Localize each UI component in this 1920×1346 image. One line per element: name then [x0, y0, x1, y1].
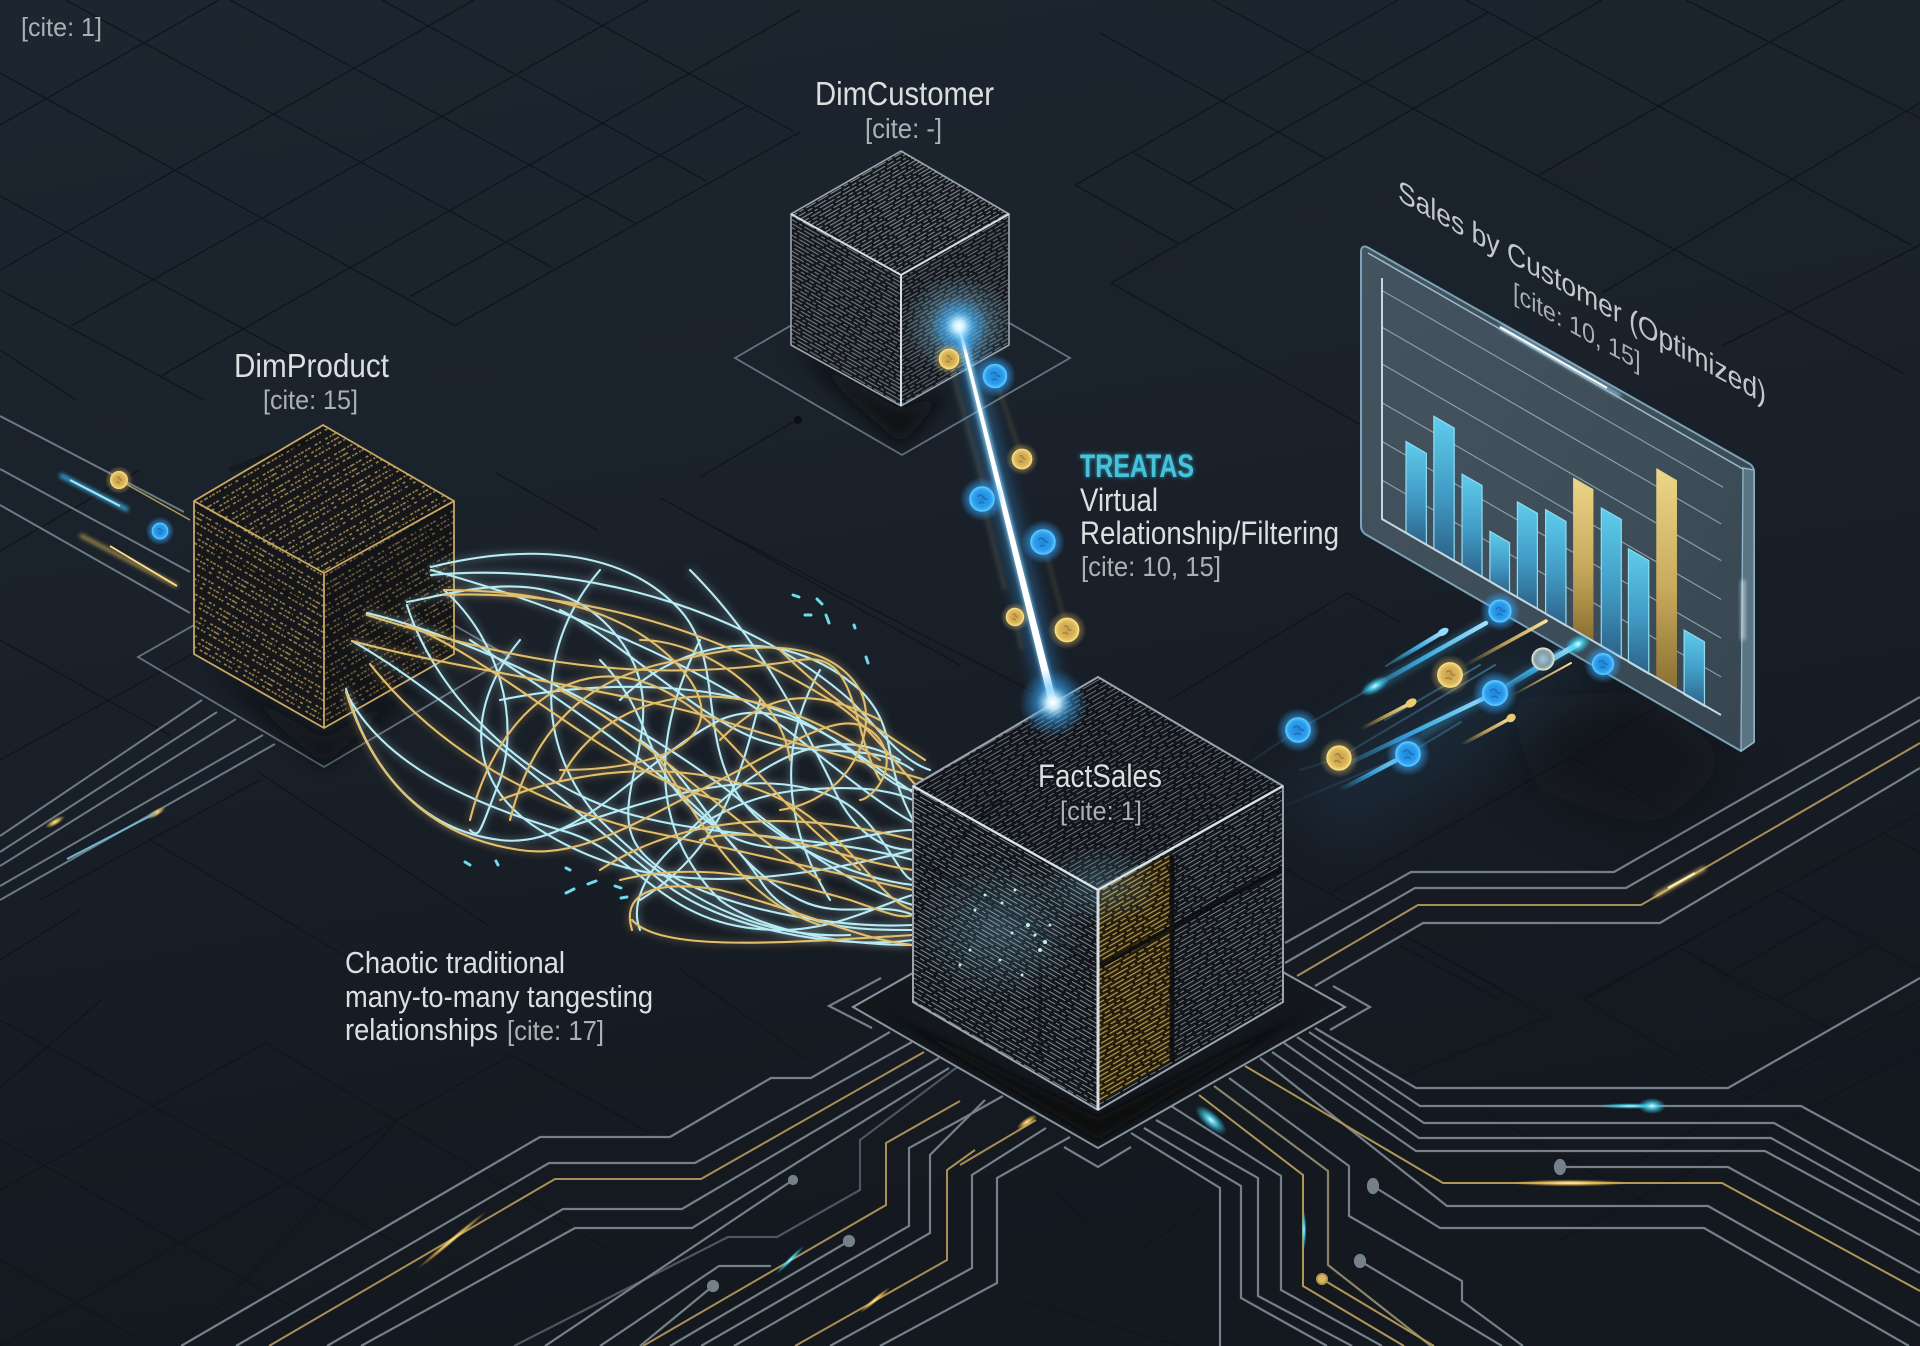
- cube: DimProduct: [194, 425, 454, 728]
- circuit traces: bottom right: [1131, 978, 1920, 1346]
- label: TREATAS callout: Virtual: [1080, 482, 1158, 518]
- label: TREATAS callout: TREATAS: [1080, 448, 1194, 484]
- label: chaotic relationships note: [cite: 17]: [507, 1015, 604, 1046]
- comet glow: [1370, 623, 1578, 735]
- label: DimCustomer: [cite: -]: [865, 113, 942, 144]
- data particles on beam: [933, 343, 1086, 650]
- panel gridlines: [1382, 291, 1723, 677]
- left data stream: [60, 466, 190, 586]
- bar chart: [1406, 416, 1704, 706]
- label: DimCustomer: [815, 75, 994, 144]
- chevrons around FactSales plate: [829, 978, 1370, 1167]
- dark junction dot: [794, 416, 802, 424]
- top-left citation: [cite: 1]: [21, 12, 102, 42]
- label: FactSales: [1038, 758, 1162, 826]
- shadow: DimCustomer: [790, 345, 950, 445]
- label: DimCustomer: DimCustomer: [815, 75, 994, 112]
- circuit sparks: [44, 804, 1705, 1315]
- chart axes: [1382, 278, 1721, 715]
- particles: [1276, 591, 1622, 778]
- label: chaotic relationships note: Chaotic traditional: [345, 945, 565, 980]
- label: DimProduct: [234, 347, 389, 415]
- chart panel: [1361, 247, 1754, 751]
- label: TREATAS callout: TREATAS: [1080, 448, 1194, 484]
- panel glass body: [1361, 247, 1754, 751]
- label: FactSales: [cite: 1]: [1060, 796, 1142, 826]
- faint band glow: [1283, 640, 1610, 850]
- shadow: FactSales: [880, 1010, 1310, 1140]
- circuit traces: bottom left: [181, 1032, 1070, 1346]
- circuit traces: right: [1285, 697, 1920, 986]
- cube: FactSales: [913, 677, 1283, 1110]
- label: chaotic relationships note: [345, 945, 653, 1047]
- plate: DimProduct: [138, 551, 510, 767]
- label: TREATAS callout: Relationship/Filtering: [1080, 515, 1339, 551]
- TREATAS beam: [929, 296, 1087, 737]
- label: chaotic relationships note: relationships: [345, 1012, 498, 1047]
- chart title: Sales by Customer (Optimized): [1398, 174, 1766, 412]
- panel top highlight: [1368, 253, 1743, 640]
- comets: [1335, 623, 1578, 790]
- label: DimProduct: DimProduct: [234, 347, 389, 384]
- circuit traces: bottom right gold: [1199, 1066, 1920, 1346]
- label: TREATAS callout: [1080, 448, 1339, 582]
- data stream to chart: [1250, 591, 1622, 850]
- cube: DimCustomer: [791, 151, 1013, 406]
- shadow: DimProduct: [200, 660, 440, 765]
- plate: DimCustomer: [735, 261, 1070, 455]
- circuit traces: bottom left gold: [269, 1052, 1036, 1346]
- tangled many-to-many relationships: [346, 554, 935, 945]
- label: FactSales: FactSales: [1038, 758, 1162, 794]
- panel right edge: [1741, 468, 1754, 751]
- chart title: [cite: 10, 15]: [1513, 276, 1641, 377]
- trails: [1250, 631, 1560, 812]
- label: chaotic relationships note: many-to-many tangesting: [345, 979, 653, 1014]
- label: TREATAS callout: [cite: 10, 15]: [1081, 551, 1221, 582]
- shadow: chart panel: [1500, 690, 1740, 830]
- plate: FactSales: [853, 868, 1345, 1148]
- label: DimProduct: [cite: 15]: [263, 385, 358, 415]
- circuit trace: right gold: [1297, 743, 1920, 976]
- circuit traces: left stream lines: [0, 416, 275, 900]
